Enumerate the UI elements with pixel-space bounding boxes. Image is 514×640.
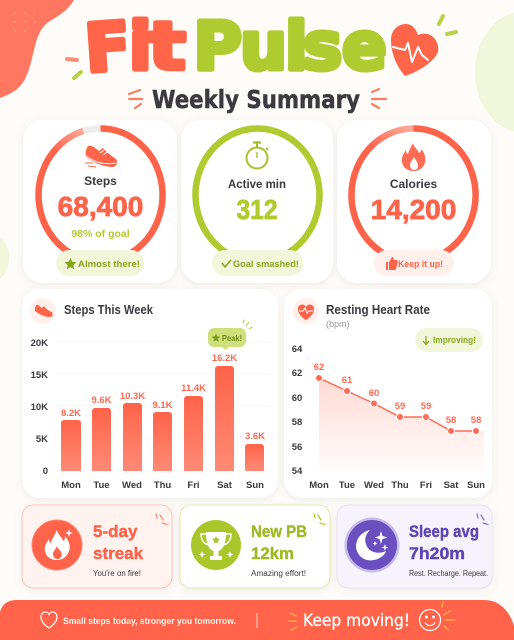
panel: active min [181, 120, 333, 283]
pill: almost there: Almost there! [78, 259, 140, 270]
pill: improving [415, 328, 483, 352]
label: Steps [84, 174, 117, 188]
text: New PB [251, 522, 307, 541]
ring: steps [39, 128, 163, 253]
panel: steps [23, 120, 177, 283]
bar chart: 15K [31, 370, 48, 381]
line chart: Tue [339, 480, 355, 491]
pill: improving: Improving! [433, 335, 476, 346]
panel: calories [337, 120, 491, 283]
callout: peak [208, 320, 252, 350]
title: FitPulse: i [129, 8, 152, 85]
bar chart: 10K [31, 402, 48, 413]
icon: smiley [420, 610, 440, 630]
bar chart: 10.3K [120, 391, 145, 402]
title: FitPulse [67, 8, 456, 88]
keep moving: Keep moving! [303, 611, 410, 631]
note: 98% of goal [71, 228, 130, 240]
icon: stopwatch [246, 142, 268, 168]
line chart: 59 [395, 401, 405, 412]
label: Active min [228, 177, 286, 191]
card: streak: streak [93, 544, 144, 563]
panel: resting heart rate [284, 289, 492, 498]
line chart: Thu [391, 480, 409, 491]
line chart: 59 [421, 401, 431, 412]
bar chart: Tue [93, 480, 110, 491]
footer banner [0, 600, 514, 640]
line chart: 64 [292, 344, 303, 355]
line chart: Sat [444, 480, 459, 491]
ring: calories [351, 128, 476, 253]
pill: keep it up: Keep it up! [398, 259, 443, 270]
icon: heart outline [41, 612, 57, 628]
pill: goal smashed: Goal smashed! [233, 259, 299, 270]
line chart: Fri [420, 480, 432, 491]
icon: heart with pulse [391, 24, 438, 76]
bar chart: 11.4K [181, 383, 206, 394]
text: 5-day [93, 522, 138, 541]
icon: flame badge [32, 520, 82, 570]
icon: heart badge [293, 298, 319, 324]
card: sleep [337, 505, 492, 588]
line chart: Mon [309, 480, 329, 491]
callout: peak: Peak! [222, 333, 242, 343]
bar chart: Wed [122, 480, 142, 491]
line chart: 61 [342, 375, 353, 386]
value: 68,400 [58, 191, 143, 222]
heading: Resting Heart Rate [326, 303, 430, 317]
title sparks [67, 16, 456, 78]
bar chart: 16.2K [212, 353, 237, 364]
pill: goal smashed [212, 250, 303, 276]
bar chart: Sat [217, 480, 233, 491]
pill: almost there [56, 250, 144, 276]
card: streak [22, 505, 172, 588]
line chart: 58 [292, 417, 302, 428]
icon: moon badge [344, 518, 400, 572]
bar chart: 3.6K [245, 431, 265, 442]
bar chart: 5K [36, 434, 48, 445]
card: sleep: 7h20m [409, 544, 465, 563]
bar chart: 0 [43, 466, 48, 477]
icon: shoe badge [30, 298, 56, 324]
card: sleep: Rest. Recharge. Repeat. [409, 569, 488, 578]
title: FitPulse: Pulse [194, 8, 387, 85]
bar chart: Mon [61, 480, 81, 491]
line chart [292, 344, 485, 491]
bar chart: Sun [246, 480, 264, 491]
line chart: 56 [292, 442, 302, 453]
icon: trophy badge [191, 520, 241, 570]
bar chart: 8.2K [61, 408, 81, 419]
icon: flame [402, 143, 425, 171]
title: FitPulse: t [148, 8, 186, 85]
bar chart: Thu [154, 480, 171, 491]
subtitle: Weekly Summary: Weekly Summary [152, 85, 360, 114]
line chart: 60 [292, 393, 302, 404]
panel: steps this week [22, 289, 278, 498]
card: streak: You're on fire! [93, 569, 141, 578]
heading: Steps This Week [64, 303, 153, 317]
card: new PB: 12km [251, 544, 294, 563]
value: 312 [236, 194, 278, 225]
pill: keep it up [374, 250, 454, 276]
icon: running shoe [85, 146, 117, 167]
ring: active [196, 129, 320, 253]
line chart: Sun [467, 480, 485, 491]
line chart: 62 [292, 368, 302, 379]
line chart: 62 [314, 362, 324, 373]
tagline: Small steps today, stronger you tomorrow. [63, 616, 236, 627]
bar chart: 9.1K [152, 400, 173, 411]
value: 14,200 [371, 194, 456, 225]
bar chart: 20K [31, 338, 48, 349]
card: new PB: Amazing effort! [251, 569, 306, 578]
decorative blobs [0, 0, 514, 282]
card: new PB [180, 505, 330, 588]
bar chart [31, 338, 270, 491]
line chart: 60 [369, 388, 379, 399]
line chart: 58 [446, 415, 456, 426]
sparks [289, 602, 455, 630]
unit: (bpm) [326, 319, 350, 329]
text: Sleep avg [409, 522, 479, 541]
bar chart: 9.6K [91, 395, 112, 406]
title: FitPulse: F [83, 8, 133, 88]
bar chart: Fri [187, 480, 200, 491]
line chart: Wed [364, 480, 384, 491]
line chart: 54 [292, 466, 303, 477]
line chart: 58 [471, 415, 481, 426]
label: Calories [390, 177, 438, 191]
